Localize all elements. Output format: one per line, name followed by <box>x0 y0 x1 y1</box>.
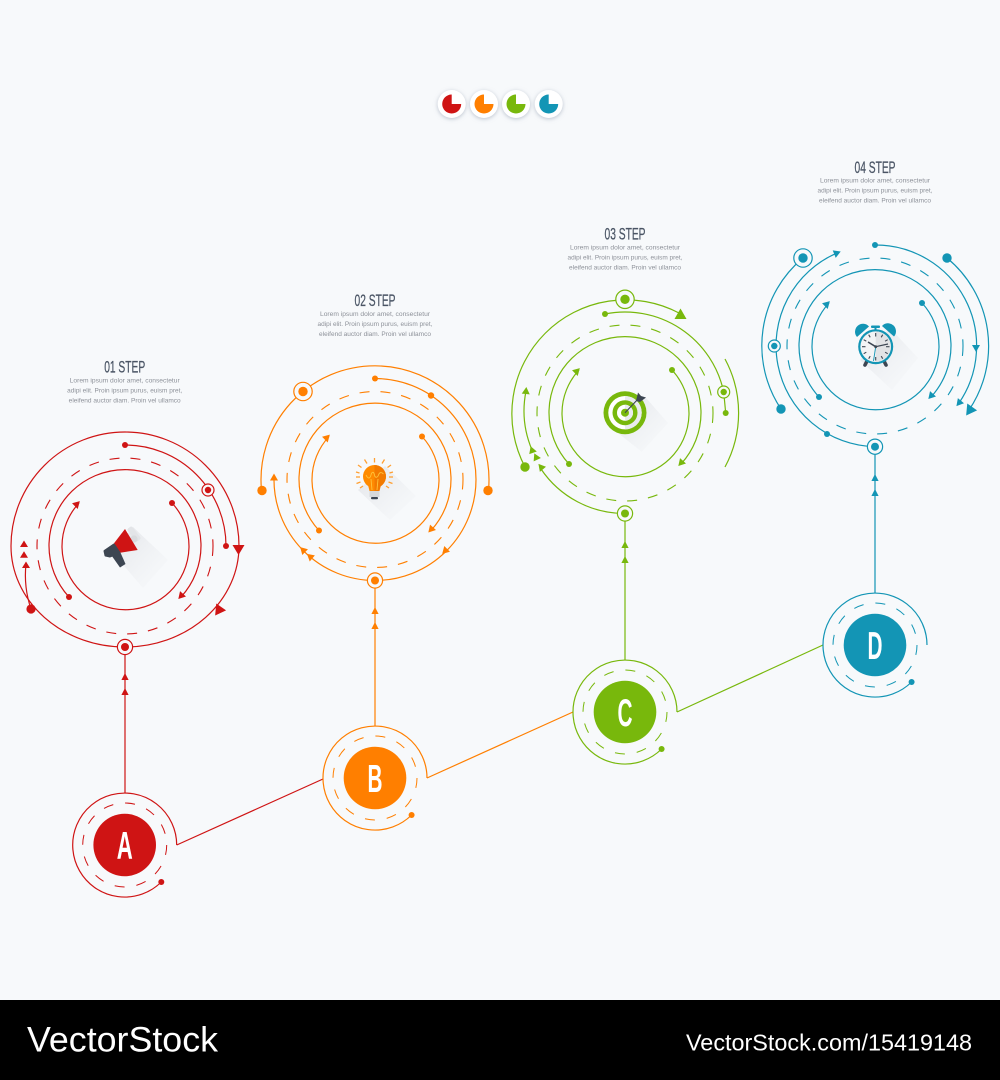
bottom node <box>867 439 883 454</box>
second arc with arrow <box>799 270 951 402</box>
step 2 text block <box>318 291 433 338</box>
step 3 text block: 03 STEP <box>604 224 646 243</box>
step 1 text block: Lorem ipsum dolor amet, consectetur <box>70 378 180 384</box>
step 4 text block <box>818 158 933 205</box>
bottom node <box>617 506 633 521</box>
node B <box>323 726 427 830</box>
step 2 text block: Lorem ipsum dolor amet, consectetur <box>320 312 430 318</box>
bottom node <box>117 639 133 655</box>
outer right arc with large arrow <box>942 253 989 419</box>
icon: megaphone <box>104 526 168 588</box>
step 3 text block: adipi elit. Proin ipsum purus, euism pret, <box>568 255 683 261</box>
panel: step 3 orbit rings <box>512 290 739 521</box>
bottom node <box>367 573 383 588</box>
panel: step 1 orbit rings <box>11 432 244 655</box>
link line B to C <box>427 712 573 778</box>
third right arc with arrows <box>872 242 980 409</box>
node A: A <box>117 825 133 868</box>
third arc with arrows <box>270 376 476 580</box>
outer left arc with large node <box>762 249 812 414</box>
outer right arc <box>725 359 739 467</box>
step 1 text block <box>67 358 183 404</box>
step 1 text block: eleifend auctor diam. Proin vel ullamco <box>69 398 181 404</box>
step 4 text block: eleifend auctor diam. Proin vel ullamco <box>819 199 932 205</box>
left arc with triple arrows <box>20 540 36 614</box>
footer banner <box>0 1000 1000 1080</box>
outer orbit with large node <box>257 366 493 495</box>
step 4 text block: 04 STEP <box>854 158 896 177</box>
inner arc with arrow <box>562 365 689 477</box>
step 4 text block: Lorem ipsum dolor amet, consectetur <box>820 179 930 185</box>
node C <box>573 660 677 764</box>
panel: step 4 orbit rings <box>762 242 989 454</box>
dashed ring <box>537 325 713 501</box>
inner arc with arrow <box>312 432 439 543</box>
connector B: vertical line with arrows <box>371 588 379 726</box>
step 1 text block: adipi elit. Proin ipsum purus, euism pret, <box>67 388 183 394</box>
step 2 text block: eleifend auctor diam. Proin vel ullamco <box>319 332 432 338</box>
third left arc with node and arrow <box>768 248 875 447</box>
step 2 text block: adipi elit. Proin ipsum purus, euism pret, <box>318 322 433 328</box>
node D <box>823 593 927 697</box>
dashed ring <box>37 458 213 634</box>
step 3 text block: eleifend auctor diam. Proin vel ullamco <box>569 265 682 271</box>
step 2 text block: 02 STEP <box>354 291 396 310</box>
step 4 text block: adipi elit. Proin ipsum purus, euism pret, <box>818 189 933 195</box>
dashed ring <box>787 258 963 434</box>
link line A to B <box>177 779 323 845</box>
icon: alarm clock <box>855 323 918 390</box>
step 1 text block: 01 STEP <box>104 358 145 377</box>
footer banner: VectorStock.com/15419148 <box>686 1030 972 1056</box>
outer orbit with large arrows <box>11 432 244 647</box>
step 3 text block: Lorem ipsum dolor amet, consectetur <box>570 245 680 251</box>
node C: C <box>618 692 632 735</box>
dashed ring <box>287 392 463 568</box>
step 3 text block <box>568 224 683 271</box>
second arc with arrow <box>49 470 201 602</box>
third arc with node and pin <box>602 311 730 416</box>
connector D: vertical line with arrows <box>871 454 879 593</box>
link line C to D <box>677 645 823 712</box>
node D: D <box>868 625 882 668</box>
third arc with node <box>122 442 229 549</box>
icon: light bulb <box>356 458 416 520</box>
outer top orbit with large arrow <box>512 290 686 472</box>
second arc with arrow <box>549 337 701 469</box>
second arc with arrow <box>299 403 451 535</box>
node B: B <box>368 758 382 801</box>
footer banner: VectorStock <box>27 1020 219 1060</box>
node A <box>73 793 177 897</box>
inner arc with arrow <box>62 498 189 610</box>
lower left arc with arrows <box>522 387 625 514</box>
legend: four pie badges <box>438 90 563 118</box>
icon: target with dart <box>604 391 668 452</box>
connector A: vertical line with arrows <box>121 654 129 793</box>
inner arc with arrow <box>812 298 939 410</box>
panel: step 2 orbit rings <box>257 366 493 588</box>
connector C: vertical line with arrows <box>621 521 629 660</box>
